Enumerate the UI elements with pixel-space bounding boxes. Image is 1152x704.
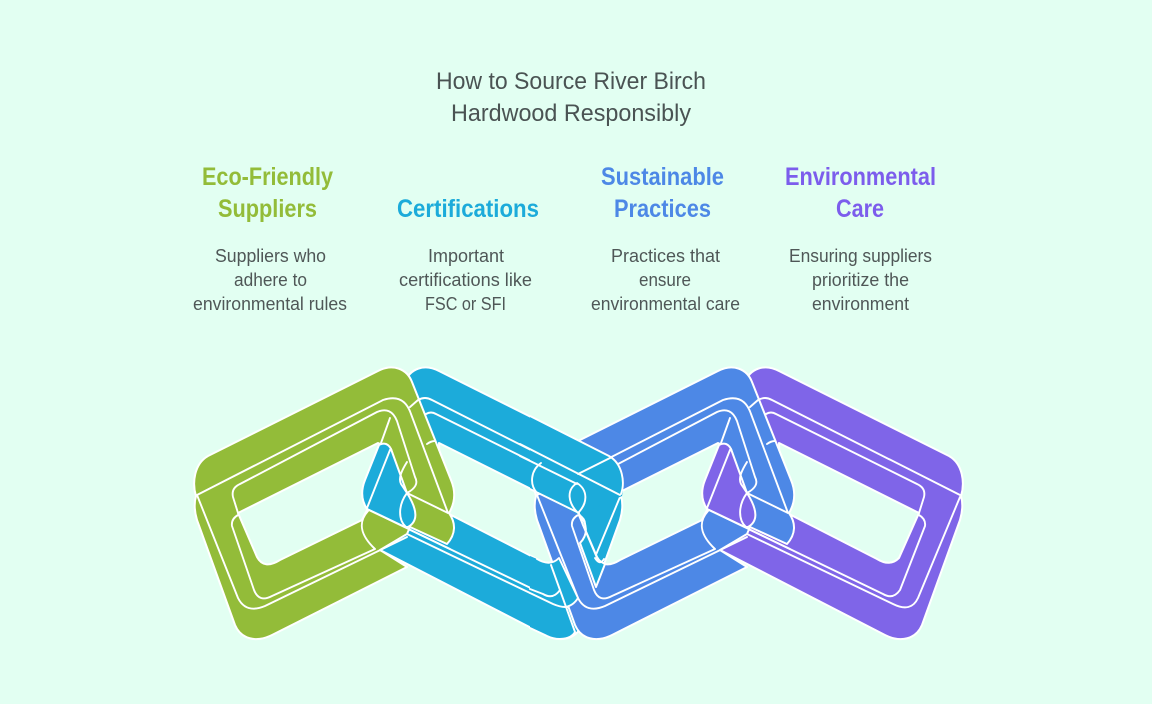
chain link: purple	[707, 367, 963, 639]
title: Hardwood Responsibly	[451, 100, 692, 127]
column: Sustainable Practices: ensure	[639, 270, 691, 290]
column: Environmental Care: Environmental	[785, 163, 936, 191]
chain link: green	[194, 367, 454, 639]
column: Environmental Care: environment	[812, 294, 909, 314]
chain link: blue	[367, 367, 623, 639]
column: Certifications: FSC or SFI	[425, 294, 506, 314]
column: Environmental Care: Ensuring suppliers	[789, 246, 932, 266]
column: Eco-Friendly Suppliers: Eco-Friendly	[202, 163, 333, 191]
column: Certifications	[397, 195, 539, 314]
column: Eco-Friendly Suppliers	[193, 163, 347, 314]
column: Eco-Friendly Suppliers: environmental rules	[193, 294, 347, 314]
column: Certifications: Important	[428, 246, 504, 266]
chain link: indigo	[534, 367, 794, 639]
column: Sustainable Practices: Practices	[614, 195, 711, 223]
title	[436, 68, 706, 127]
overlap: blue top band over indigo	[520, 416, 623, 515]
overlap: blue over green	[362, 444, 450, 549]
column: Environmental Care: Care	[836, 195, 884, 223]
column: Sustainable Practices: environmental care	[591, 294, 740, 314]
column: Certifications: certifications like	[399, 270, 532, 290]
column: Environmental Care	[785, 163, 936, 314]
column: Eco-Friendly Suppliers: Suppliers who	[215, 246, 326, 266]
overlap: purple over indigo	[702, 444, 790, 549]
column: Sustainable Practices: Sustainable	[601, 163, 724, 191]
overlap: blue bottom corner over indigo	[530, 556, 578, 639]
column: Sustainable Practices	[591, 163, 740, 314]
title: How to Source River Birch	[436, 68, 706, 95]
column: Sustainable Practices: Practices that	[611, 246, 720, 266]
column: Environmental Care: prioritize the	[812, 270, 909, 290]
column: Certifications: Certifications	[397, 195, 539, 223]
overlap: blue wedge inside indigo link	[579, 514, 605, 587]
column: Eco-Friendly Suppliers: Suppliers	[218, 195, 317, 223]
column: Eco-Friendly Suppliers: adhere to	[234, 270, 307, 290]
